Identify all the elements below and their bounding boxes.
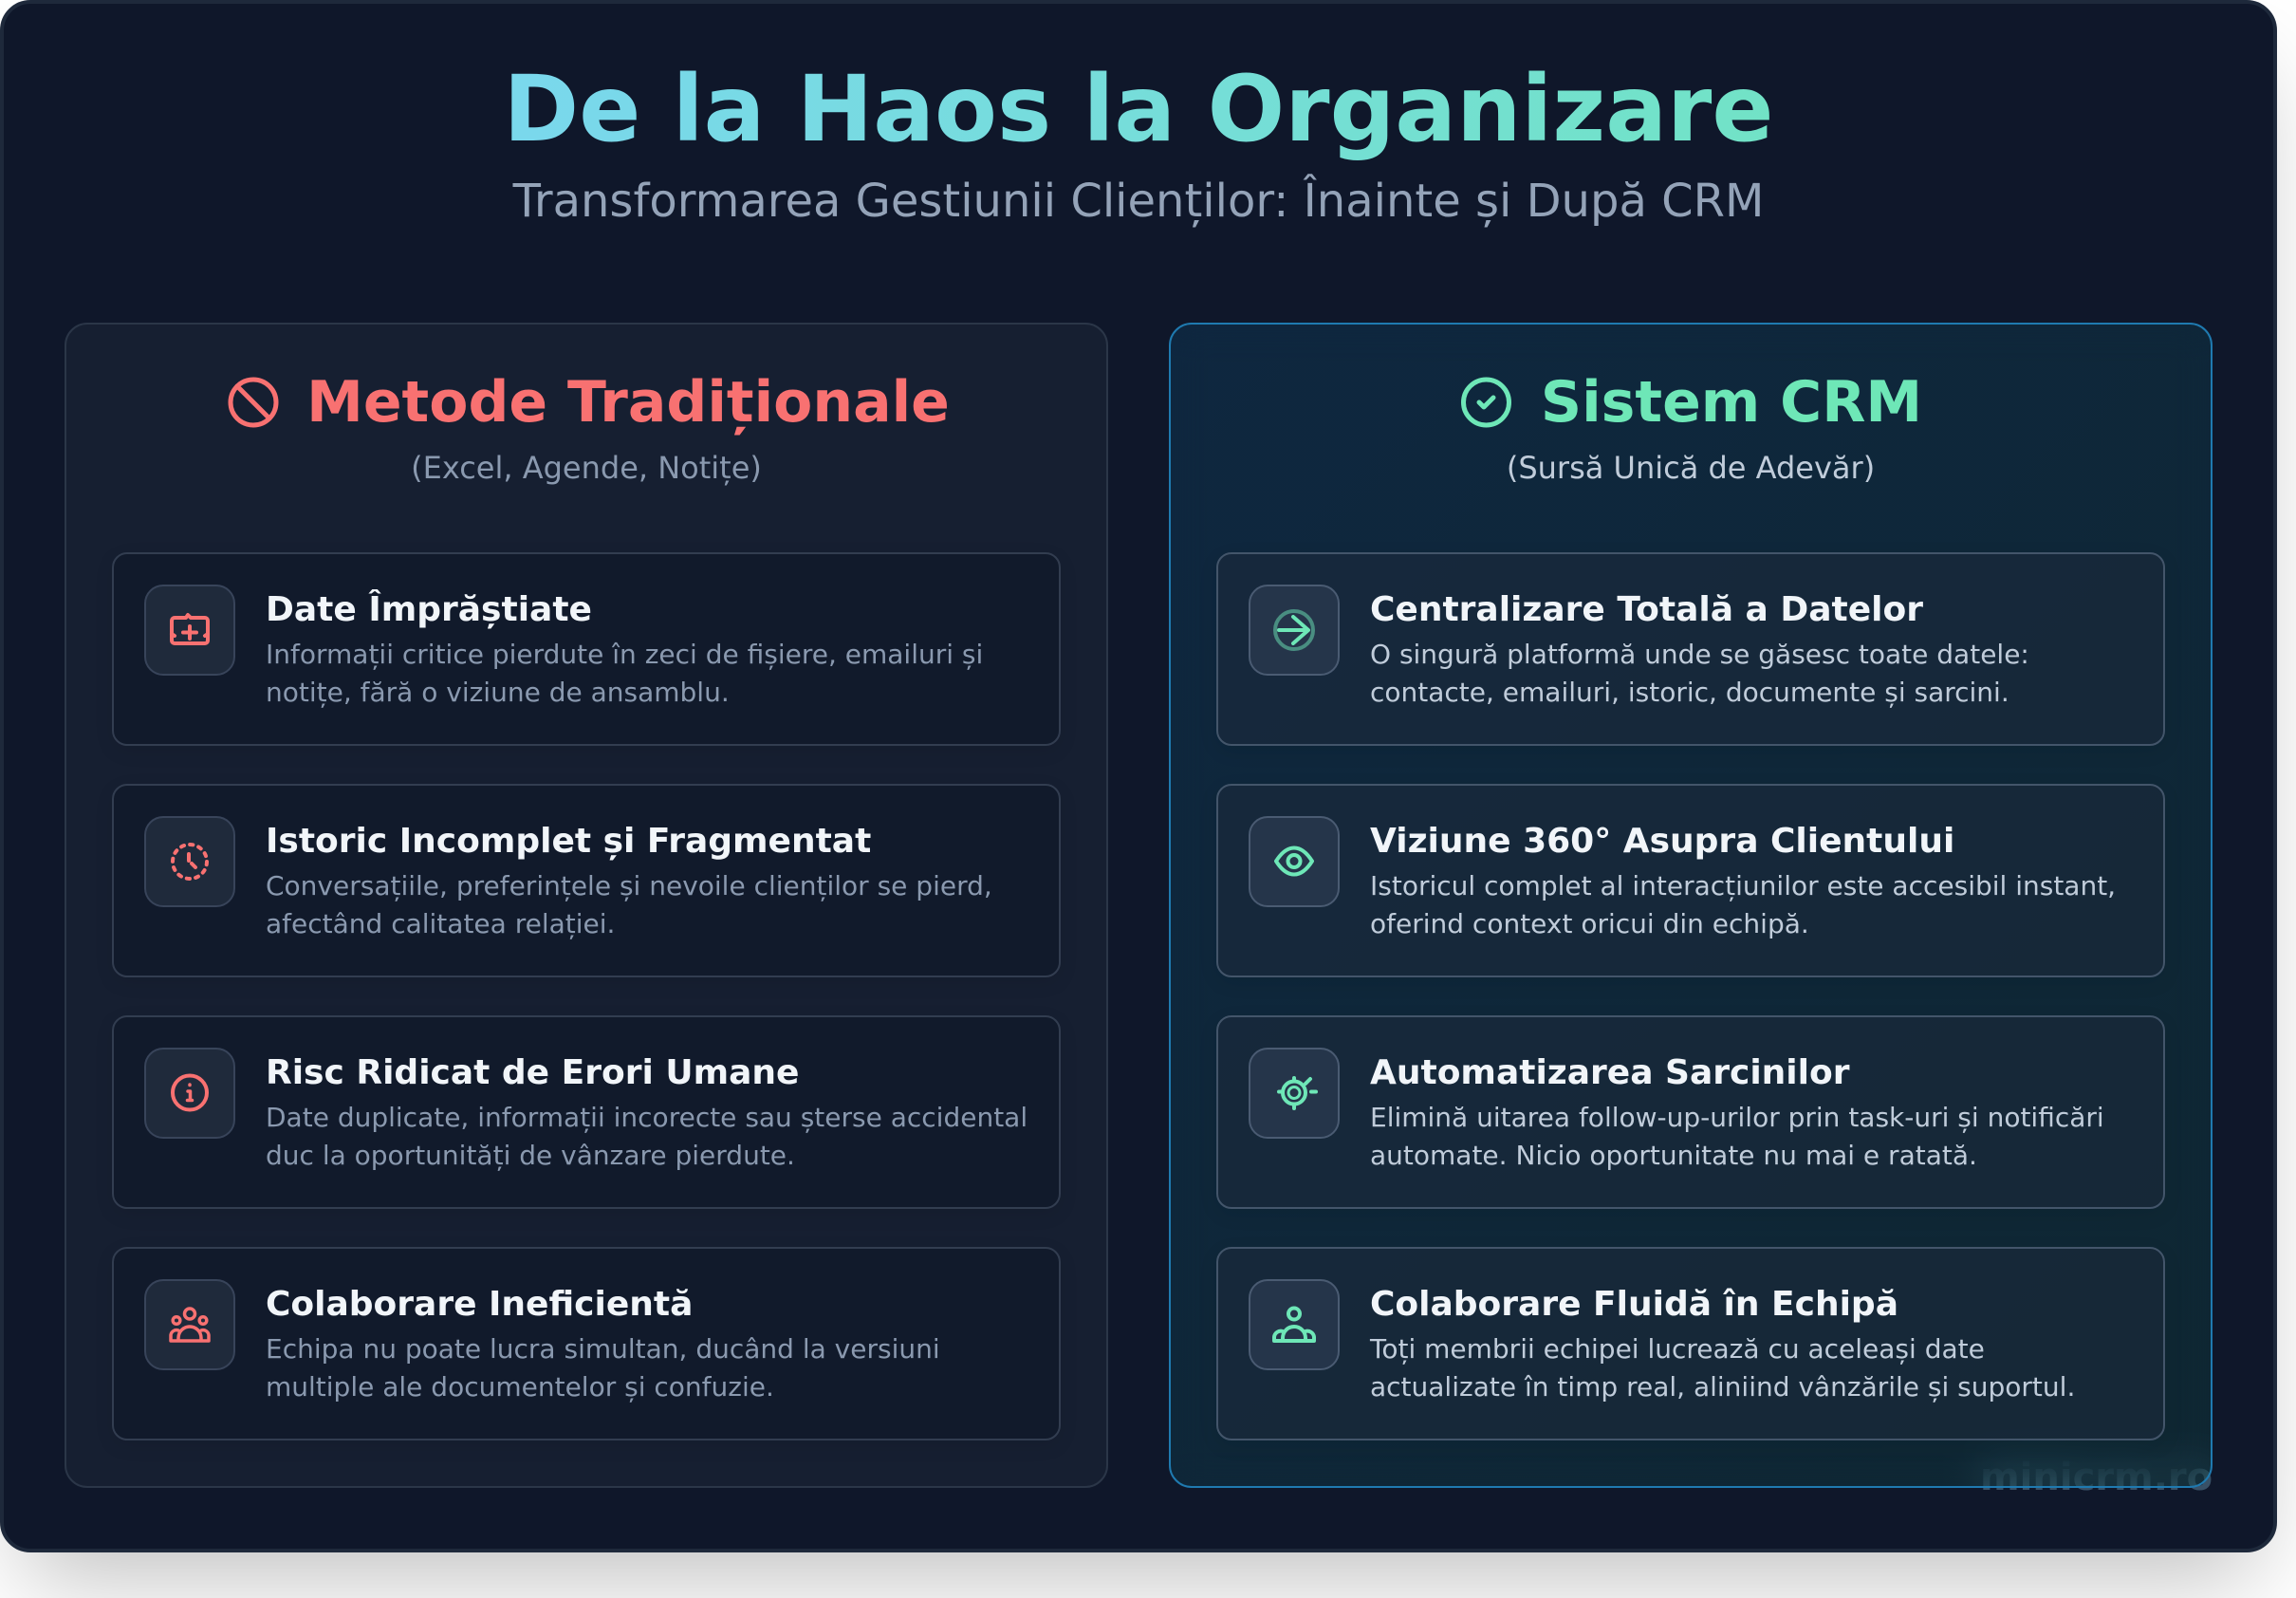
item: Risc Ridicat xyxy=(112,1015,1061,1209)
item: Viziune 360 xyxy=(1216,784,2165,977)
item: Centralizare: O singură platformă unde se găsesc toate datele: xyxy=(1370,639,2029,670)
item: Centralizare: contacte, emailuri, istoric, documente și sarcini. xyxy=(1370,677,2009,708)
item: Automatizare: Elimină uitarea follow-up-urilor prin task-uri și notificări xyxy=(1370,1102,2104,1133)
item: Risc Ridicat: Date duplicate, informații incorecte sau șterse accidental xyxy=(266,1102,1028,1133)
icon: eye xyxy=(1249,816,1340,907)
icon: team member xyxy=(1249,1279,1340,1370)
icon: group xyxy=(144,1279,235,1370)
watermark: minicrm.ro xyxy=(1980,1456,2213,1499)
item: Colaborare Ineficientă: Colaborare Ineficientă xyxy=(266,1285,693,1324)
subheading: (Sursă Unică de Adevăr) xyxy=(1507,450,1875,486)
title: De la Haos la Organizare xyxy=(504,56,1773,162)
item: Centralizare xyxy=(1216,552,2165,746)
item: Date Împrăștiate: notițe, fără o viziune de ansamblu. xyxy=(266,677,730,708)
item: Colaborare Fluidă: Colaborare Fluidă în Echipă xyxy=(1370,1285,1898,1324)
icon: arrow in circle xyxy=(1249,585,1340,676)
subheading: (Excel, Agende, Notițe) xyxy=(411,450,762,486)
item: Colaborare Ineficientă xyxy=(112,1247,1061,1440)
item: Centralizare: Centralizare Totală a Datelor xyxy=(1370,590,1923,629)
item: Istoric Incomplet xyxy=(112,784,1061,977)
icon: folder plus xyxy=(144,585,235,676)
item: Date Împrăștiate: Informații critice pierdute în zeci de fișiere, emailuri și xyxy=(266,639,983,670)
heading: Sistem CRM: Sistem CRM xyxy=(1541,369,1922,436)
item: Colaborare Ineficientă: multiple ale documentelor și confuzie. xyxy=(266,1371,774,1403)
item: Risc Ridicat: Risc Ridicat de Erori Umane xyxy=(266,1053,799,1092)
item: Viziune 360: oferind context oricui din echipă. xyxy=(1370,908,1809,939)
icon: automation target xyxy=(1249,1048,1340,1139)
item: Risc Ridicat: duc la oportunități de vânzare pierdute. xyxy=(266,1140,795,1171)
panel: traditional methods xyxy=(65,323,1108,1488)
icon: dashed clock xyxy=(144,816,235,907)
item: Viziune 360: Istoricul complet al interacțiunilor este accesibil instant, xyxy=(1370,870,2116,901)
item: Colaborare Fluidă: Toți membrii echipei lucrează cu aceleași date xyxy=(1370,1333,1985,1365)
panel: CRM system xyxy=(1169,323,2213,1488)
subtitle: Transformarea Gestiunii Clienților: Înainte și După CRM xyxy=(513,175,1764,228)
item: Colaborare Ineficientă: Echipa nu poate lucra simultan, ducând la versiuni xyxy=(266,1333,940,1365)
item: Colaborare Fluidă: actualizate în timp real, aliniind vânzările și suportul. xyxy=(1370,1371,2075,1403)
item: Istoric Incomplet: Conversațiile, preferințele și nevoile clienților se pierd, xyxy=(266,870,992,901)
item: Automatizare: automate. Nicio oportunitate nu mai e ratată. xyxy=(1370,1140,1977,1171)
item: Viziune 360: Viziune 360° Asupra Clientului xyxy=(1370,822,1954,861)
heading: Metode Tradiționale: Metode Tradiționale xyxy=(306,369,950,436)
item: Date Împrăștiate: Date Împrăștiate xyxy=(266,590,592,629)
item: Automatizare xyxy=(1216,1015,2165,1209)
item: Istoric Incomplet: afectând calitatea relației. xyxy=(266,908,615,939)
item: Colaborare Fluidă xyxy=(1216,1247,2165,1440)
item: Automatizare: Automatizarea Sarcinilor xyxy=(1370,1053,1849,1092)
icon: info circle xyxy=(144,1048,235,1139)
item: Istoric Incomplet: Istoric Incomplet și Fragmentat xyxy=(266,822,871,861)
item: Date Împrăștiate xyxy=(112,552,1061,746)
